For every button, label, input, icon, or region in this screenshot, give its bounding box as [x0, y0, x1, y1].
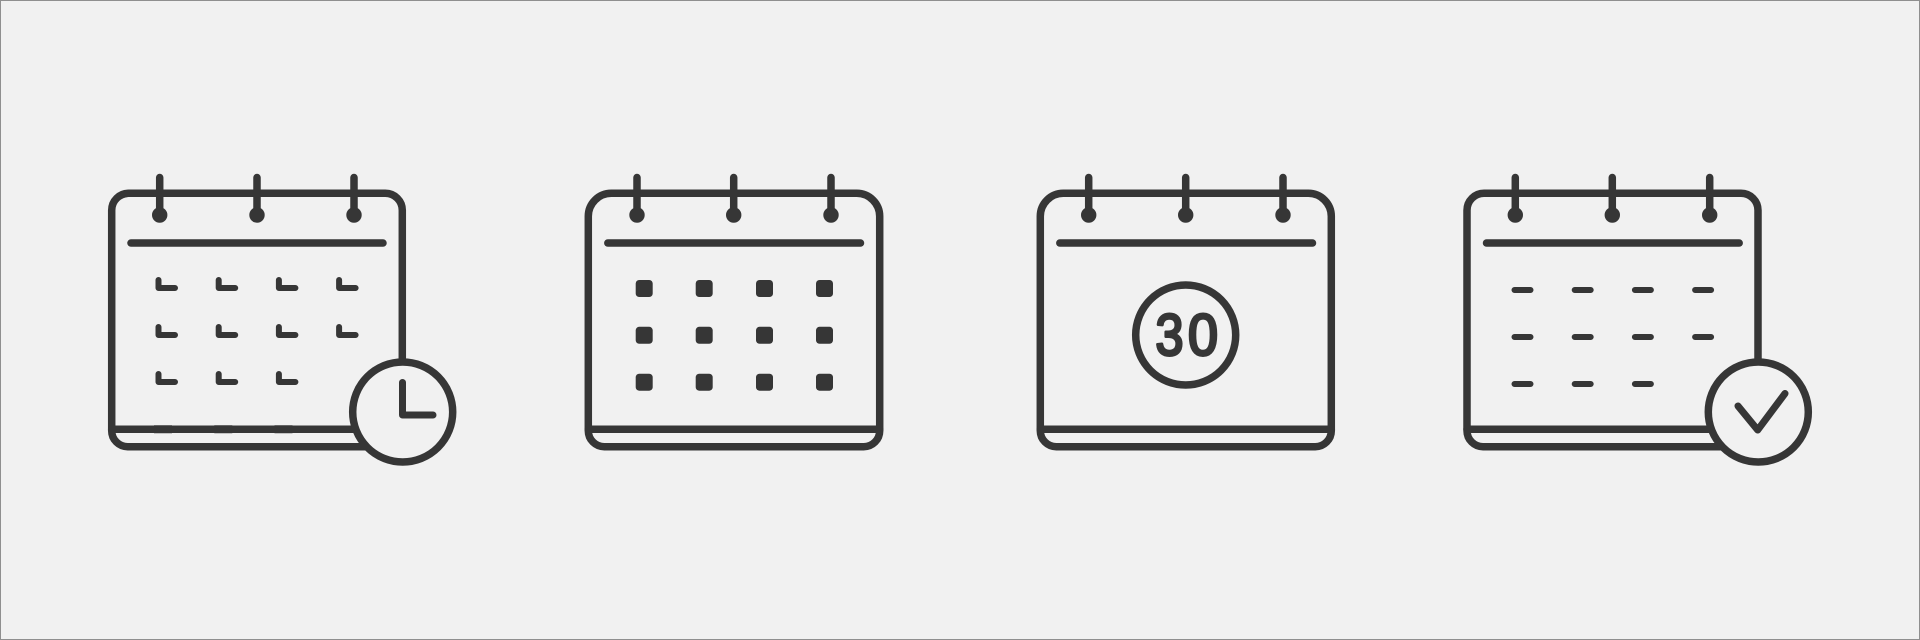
icon: calendar with clock: [112, 178, 453, 462]
date badge: 30: 0: [1188, 303, 1218, 368]
icon: clock badge: [353, 362, 453, 462]
icon: check badge: [1708, 362, 1808, 462]
date badge: 30: [1136, 285, 1236, 385]
icon: calendar with square dates: [588, 178, 880, 447]
icon: calendar with day 30: [1040, 178, 1331, 447]
icon: calendar with check mark: [1467, 178, 1808, 462]
date badge: 30: 3: [1156, 303, 1184, 368]
